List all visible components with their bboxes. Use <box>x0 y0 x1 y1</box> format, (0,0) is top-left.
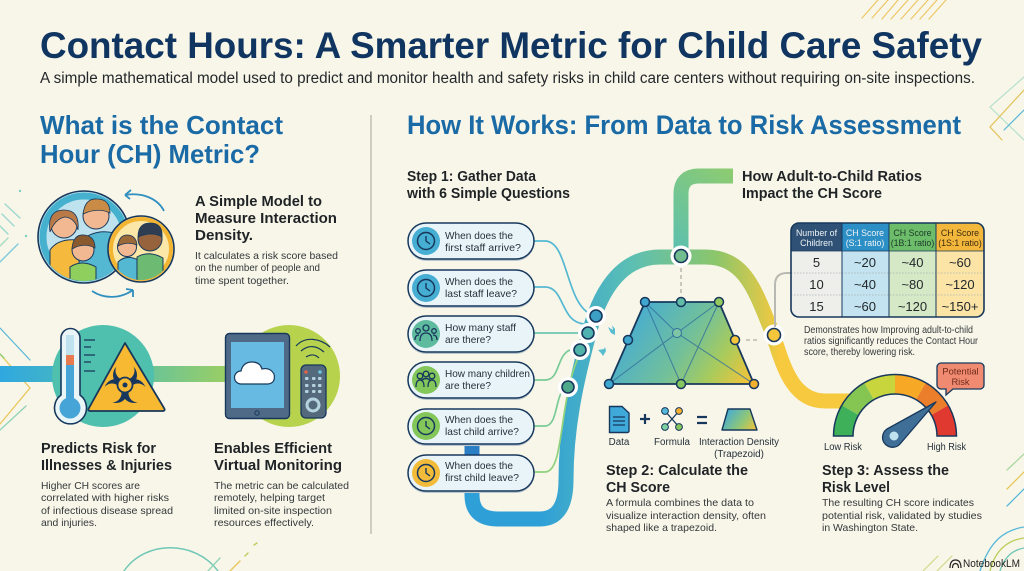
block: predicts risk: Illnesses & Injuries <box>41 458 172 474</box>
table caption: score, thereby lowering risk. <box>804 346 915 358</box>
text: step 2: shaped like a trapezoid. <box>606 522 717 534</box>
icon: people in interaction circles <box>38 190 174 297</box>
block: a simple model <box>195 194 338 287</box>
node markers on path <box>560 248 782 394</box>
equals sign <box>697 417 707 423</box>
question: first child leave: When does the <box>445 461 513 472</box>
block: enables efficient monitoring: limited on-site inspection <box>214 505 332 517</box>
panel: adult to child ratios <box>742 169 984 358</box>
table: CH scores by ratio: ~60 <box>854 299 876 314</box>
question: how many children: are there? <box>445 381 491 392</box>
text: step 2: Step 2: Calculate the <box>606 463 748 479</box>
block: predicts risk: Higher CH scores are <box>41 480 140 492</box>
block: enables efficient monitoring: remotely, helping target <box>214 492 325 504</box>
table: CH scores by ratio: ~150+ <box>942 299 978 314</box>
table: CH scores by ratio: ~60 <box>949 255 971 270</box>
table: CH scores by ratio: 10 <box>809 277 824 292</box>
block: a simple model: time spent together. <box>195 275 289 287</box>
block: enables efficient monitoring: The metric can be calculated <box>214 480 349 492</box>
plus sign <box>640 414 650 424</box>
question: how many children: How many children <box>445 369 530 380</box>
logo: NotebookLM: NotebookLM <box>963 558 1020 570</box>
heading: how it works: How It Works: From Data to Risk Assessment <box>407 110 961 140</box>
gauge labels: Low Risk <box>824 442 862 453</box>
block: predicts risk: Predicts Risk for <box>41 441 156 457</box>
callout: potential risk: Risk <box>951 377 970 387</box>
text: step 3: The resulting CH score indicates <box>822 497 974 509</box>
block: predicts risk <box>41 441 173 529</box>
text: step 3 <box>822 463 982 534</box>
table: CH scores by ratio: CH Score <box>941 228 979 238</box>
block: predicts risk: of infectious disease spread <box>41 505 173 517</box>
icon: data document <box>610 406 629 432</box>
block: enables efficient monitoring <box>214 441 349 529</box>
text: step 3: in Washington State. <box>822 522 918 534</box>
equation labels: (Trapezoid) <box>714 449 764 460</box>
question: first staff arrive: first staff arrive? <box>445 243 521 254</box>
heading: what is the contact hour metric: What is the Contact <box>40 110 283 140</box>
question: how many staff: How many staff <box>445 323 516 334</box>
question: how many staff: are there? <box>445 335 491 346</box>
table: CH scores by ratio: (S:1 ratio) <box>846 238 884 248</box>
text: step 2: A formula combines the data to <box>606 497 754 509</box>
question: last staff leave: When does the <box>445 277 513 288</box>
heading: step 1: with 6 Simple Questions <box>406 186 570 202</box>
equation labels: Interaction Density <box>699 437 779 448</box>
block: a simple model: A Simple Model to <box>195 194 322 210</box>
question: first staff arrive: When does the <box>445 231 513 242</box>
table: CH scores by ratio: ~40 <box>854 277 876 292</box>
equation labels: Data <box>609 437 630 448</box>
table: CH scores by ratio: CH Score <box>893 228 932 238</box>
block: a simple model: Measure Interaction <box>195 211 337 227</box>
heading: ratios: Impact the CH Score <box>742 186 882 202</box>
icon: tablet and remote <box>226 325 340 427</box>
text: step 2: CH Score <box>606 480 670 496</box>
icon: mini trapezoid <box>722 409 757 430</box>
horizontal gradient band <box>0 366 230 382</box>
chart: interaction density trapezoid <box>604 298 758 388</box>
connector: table to path <box>775 273 792 327</box>
question: how many children <box>408 362 534 400</box>
table: CH scores by ratio: ~40 <box>901 255 924 270</box>
subtitle: A simple mathematical model used to predict and monitor health and safety risks in child care centers without requiring on-site inspections. <box>40 70 975 87</box>
callout: potential risk <box>937 363 984 395</box>
panel: what is the CH metric <box>0 110 349 529</box>
text: step 2 <box>606 463 766 534</box>
equation: data plus formula equals interaction density <box>609 406 779 460</box>
table caption: Demonstrates how Improving adult-to-child <box>804 324 973 336</box>
question: how many staff <box>408 316 534 354</box>
question: first child leave: first child leave? <box>445 473 519 484</box>
question: first child leave <box>408 455 534 493</box>
connector lines: questions to path <box>534 241 590 472</box>
text: step 3: Step 3: Assess the <box>822 463 949 479</box>
step 1: gather data <box>406 169 570 493</box>
question: first staff arrive <box>408 223 534 261</box>
text: step 3: potential risk, validated by studies <box>822 510 982 522</box>
table: CH scores by ratio: 5 <box>813 255 820 270</box>
icon: thermometer and biohazard sign <box>52 325 165 427</box>
table: CH scores by ratio: ~20 <box>854 255 876 270</box>
title: Contact Hours: A Smarter Metric for Child Care Safety <box>40 25 982 66</box>
question: last child arrive: When does the <box>445 415 513 426</box>
heading: what is the contact hour metric: Hour (CH) Metric? <box>40 139 260 169</box>
table: CH scores by ratio: Children <box>800 238 833 248</box>
table: CH scores by ratio: ~120 <box>945 277 975 292</box>
table: CH scores by ratio: ~80 <box>901 277 924 292</box>
table: CH scores by ratio: 15 <box>809 299 824 314</box>
vertical divider <box>370 115 372 534</box>
table: CH scores by ratio: ~120 <box>898 299 927 314</box>
small chevrons near path <box>598 325 615 356</box>
gauge labels: High Risk <box>927 442 966 453</box>
table: CH scores by ratio <box>791 223 984 317</box>
equation labels: Formula <box>654 437 691 448</box>
block: enables efficient monitoring: resources effectively. <box>214 517 314 529</box>
block: a simple model: on the number of people and <box>195 262 320 274</box>
heading: step 1: Step 1: Gather Data <box>407 169 537 185</box>
block: a simple model: It calculates a risk score based <box>195 250 338 262</box>
table caption: ratios significantly reduces the Contact Hour <box>804 335 978 347</box>
block: predicts risk: correlated with higher risks <box>41 492 169 504</box>
dashed links to trapezoid <box>681 268 760 340</box>
block: predicts risk: and injuries. <box>41 517 97 529</box>
chart: risk gauge <box>834 374 956 447</box>
block: enables efficient monitoring: Virtual Monitoring <box>214 458 342 474</box>
step 2: calculate the CH score <box>604 268 779 534</box>
question: last child arrive: last child arrive? <box>445 427 519 438</box>
text: step 3: Risk Level <box>822 480 890 496</box>
icon: formula network <box>662 408 682 430</box>
question: last staff leave <box>408 270 534 308</box>
step 3: assess the risk level <box>822 363 984 534</box>
callout: potential risk: Potential <box>942 366 979 376</box>
table: CH scores by ratio: Number of <box>796 228 838 238</box>
block: enables efficient monitoring: Enables Efficient <box>214 441 332 457</box>
heading: ratios: How Adult-to-Child Ratios <box>742 169 922 185</box>
text: step 2: visualize interaction density, often <box>606 510 766 522</box>
table: CH scores by ratio: CH Score <box>846 228 884 238</box>
table: CH scores by ratio: (1S:1 ratio) <box>938 238 982 248</box>
question: last staff leave: last staff leave? <box>445 289 517 300</box>
block: a simple model: Density. <box>195 228 253 244</box>
table: CH scores by ratio: (1B:1 ratio) <box>891 238 934 248</box>
metro line: data to risk path <box>472 176 850 519</box>
question: last child arrive <box>408 409 534 446</box>
